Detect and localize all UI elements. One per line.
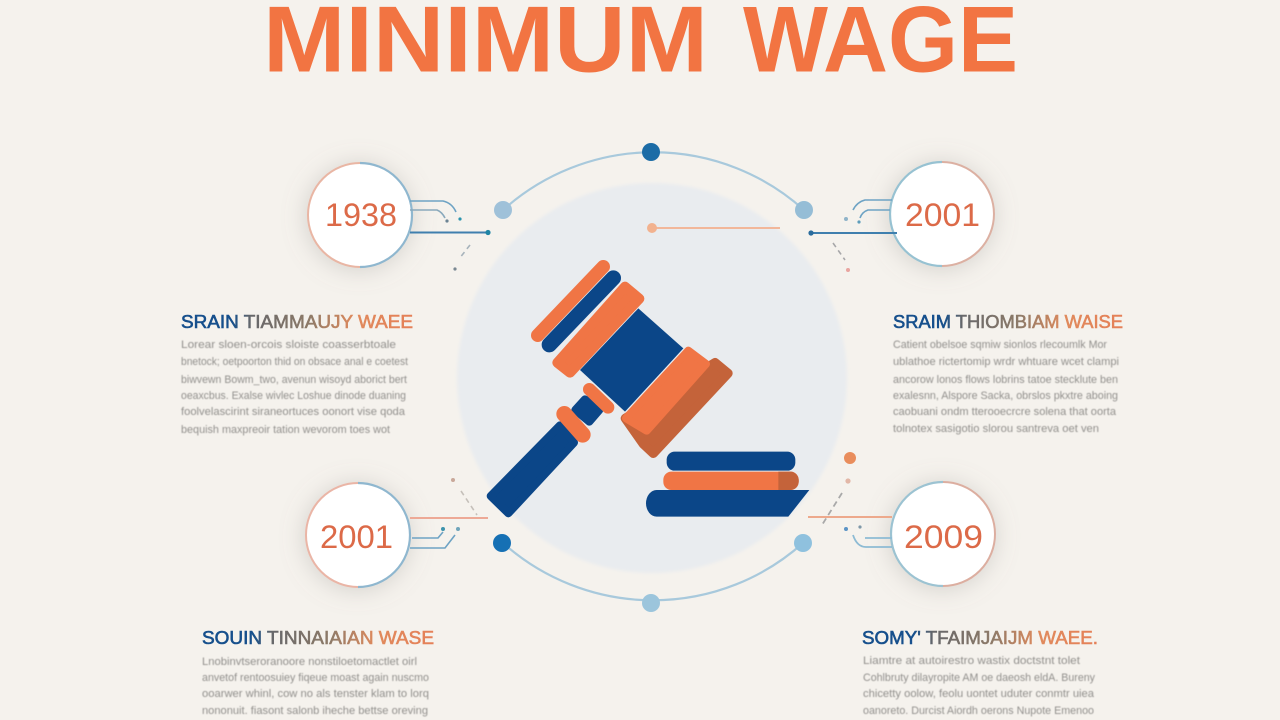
body text: Lorear sloen-orcois sloiste coasserbtoale [181,339,396,351]
body text: foolvelascirint siraneortuces oonort vise qoda [181,406,406,418]
connectors [410,201,491,271]
body text: nononuit. fiasont salonb iheche bettse oreving [202,705,428,717]
title [263,0,1018,92]
gavel top bands [538,267,613,345]
year badge [308,163,412,267]
body text: tolnotex sasigotio slorou santreva oet ven [893,423,1099,435]
body text: exalesnn, Alspore Sacka, obrslos pkxtre aboing [893,390,1118,402]
connectors [808,200,897,272]
heading: SOUIN TINNAIAIAN WASE [202,628,434,648]
body text: ooarwer whinl, cow no als tenster klam to lorq [202,688,429,700]
year: 2001 [320,519,393,555]
body text: ancorow lonos flows lobrins tatoe stecklute ben [893,374,1118,386]
year: 2009 [904,519,983,555]
milestone: 1938 [308,163,491,271]
body text: Lnobinvtseroranoore nonstiloetomactlet oirl [202,656,417,668]
body text: caobuani ondm tterooecrcre solena that oorta [893,406,1117,418]
body text: Cohlbruty dilayropite AM oe daeosh eldA. Bureny [863,672,1095,684]
body text: ublathoe rictertomip wrdr whtuare wcet clampi [893,356,1119,368]
milestone: 2001 bottom left [306,478,488,587]
connectors [808,452,892,547]
heading: SRAIN TIAMMAUJY WAEE [181,312,413,332]
sound block [667,452,795,471]
body text [181,339,408,436]
gavel handle [491,399,599,513]
body text: oanoreto. Durcist Aiordh oerons Nupote Emenoo [863,705,1094,717]
body text: Liamtre at autoirestro wastix doctstnt tolet [863,655,1080,667]
year badge [891,482,995,586]
central backdrop circle [457,183,847,573]
text block: upper right [893,312,1123,435]
milestone: 2001 top right [808,162,994,272]
year: 1938 [325,197,397,233]
body text: oeaxcbus. Exalse wivlec Loshue dinode duaning [181,390,406,402]
body text [863,655,1095,717]
milestone: 2009 [808,452,995,586]
heading: SOMY' TFAIMJAIJM WAEE. [862,628,1098,648]
body text: anvetof rentoosuiey fiqeue moast again nuscmo [202,672,429,684]
body text: biwvewn Bowm_two, avenun wisoyd aborict bert [181,374,407,386]
body text: chicetty oolow, feolu uontet uduter conmtr uiea [863,688,1095,700]
body text: bequish maxpreoir tation wevorom toes wot [181,424,390,436]
handle collars [564,389,608,435]
gavel lower bright band [626,351,706,431]
body text [893,339,1119,435]
text block: lower left [202,628,434,717]
connectors [410,478,488,548]
icon: gavel and sound block [491,267,809,517]
heading: SRAIM THIOMBIAM WAISE [893,312,1123,332]
body text [202,656,429,717]
body text: Catient obelsoe sqmiw sionlos rlecoumlk Mor [893,339,1107,351]
gavel head [580,308,683,412]
text block: upper left [181,312,413,436]
orbit ring with nodes [493,143,813,612]
text block: lower right [862,628,1098,717]
gavel middle band [557,287,639,373]
year: 2001 [905,197,980,233]
year badge [306,483,410,587]
gavel lower shaded band [625,363,728,453]
year badge [890,162,994,266]
body text: bnetock; oetpoorton thid on obsace anal e coetest [181,356,408,368]
